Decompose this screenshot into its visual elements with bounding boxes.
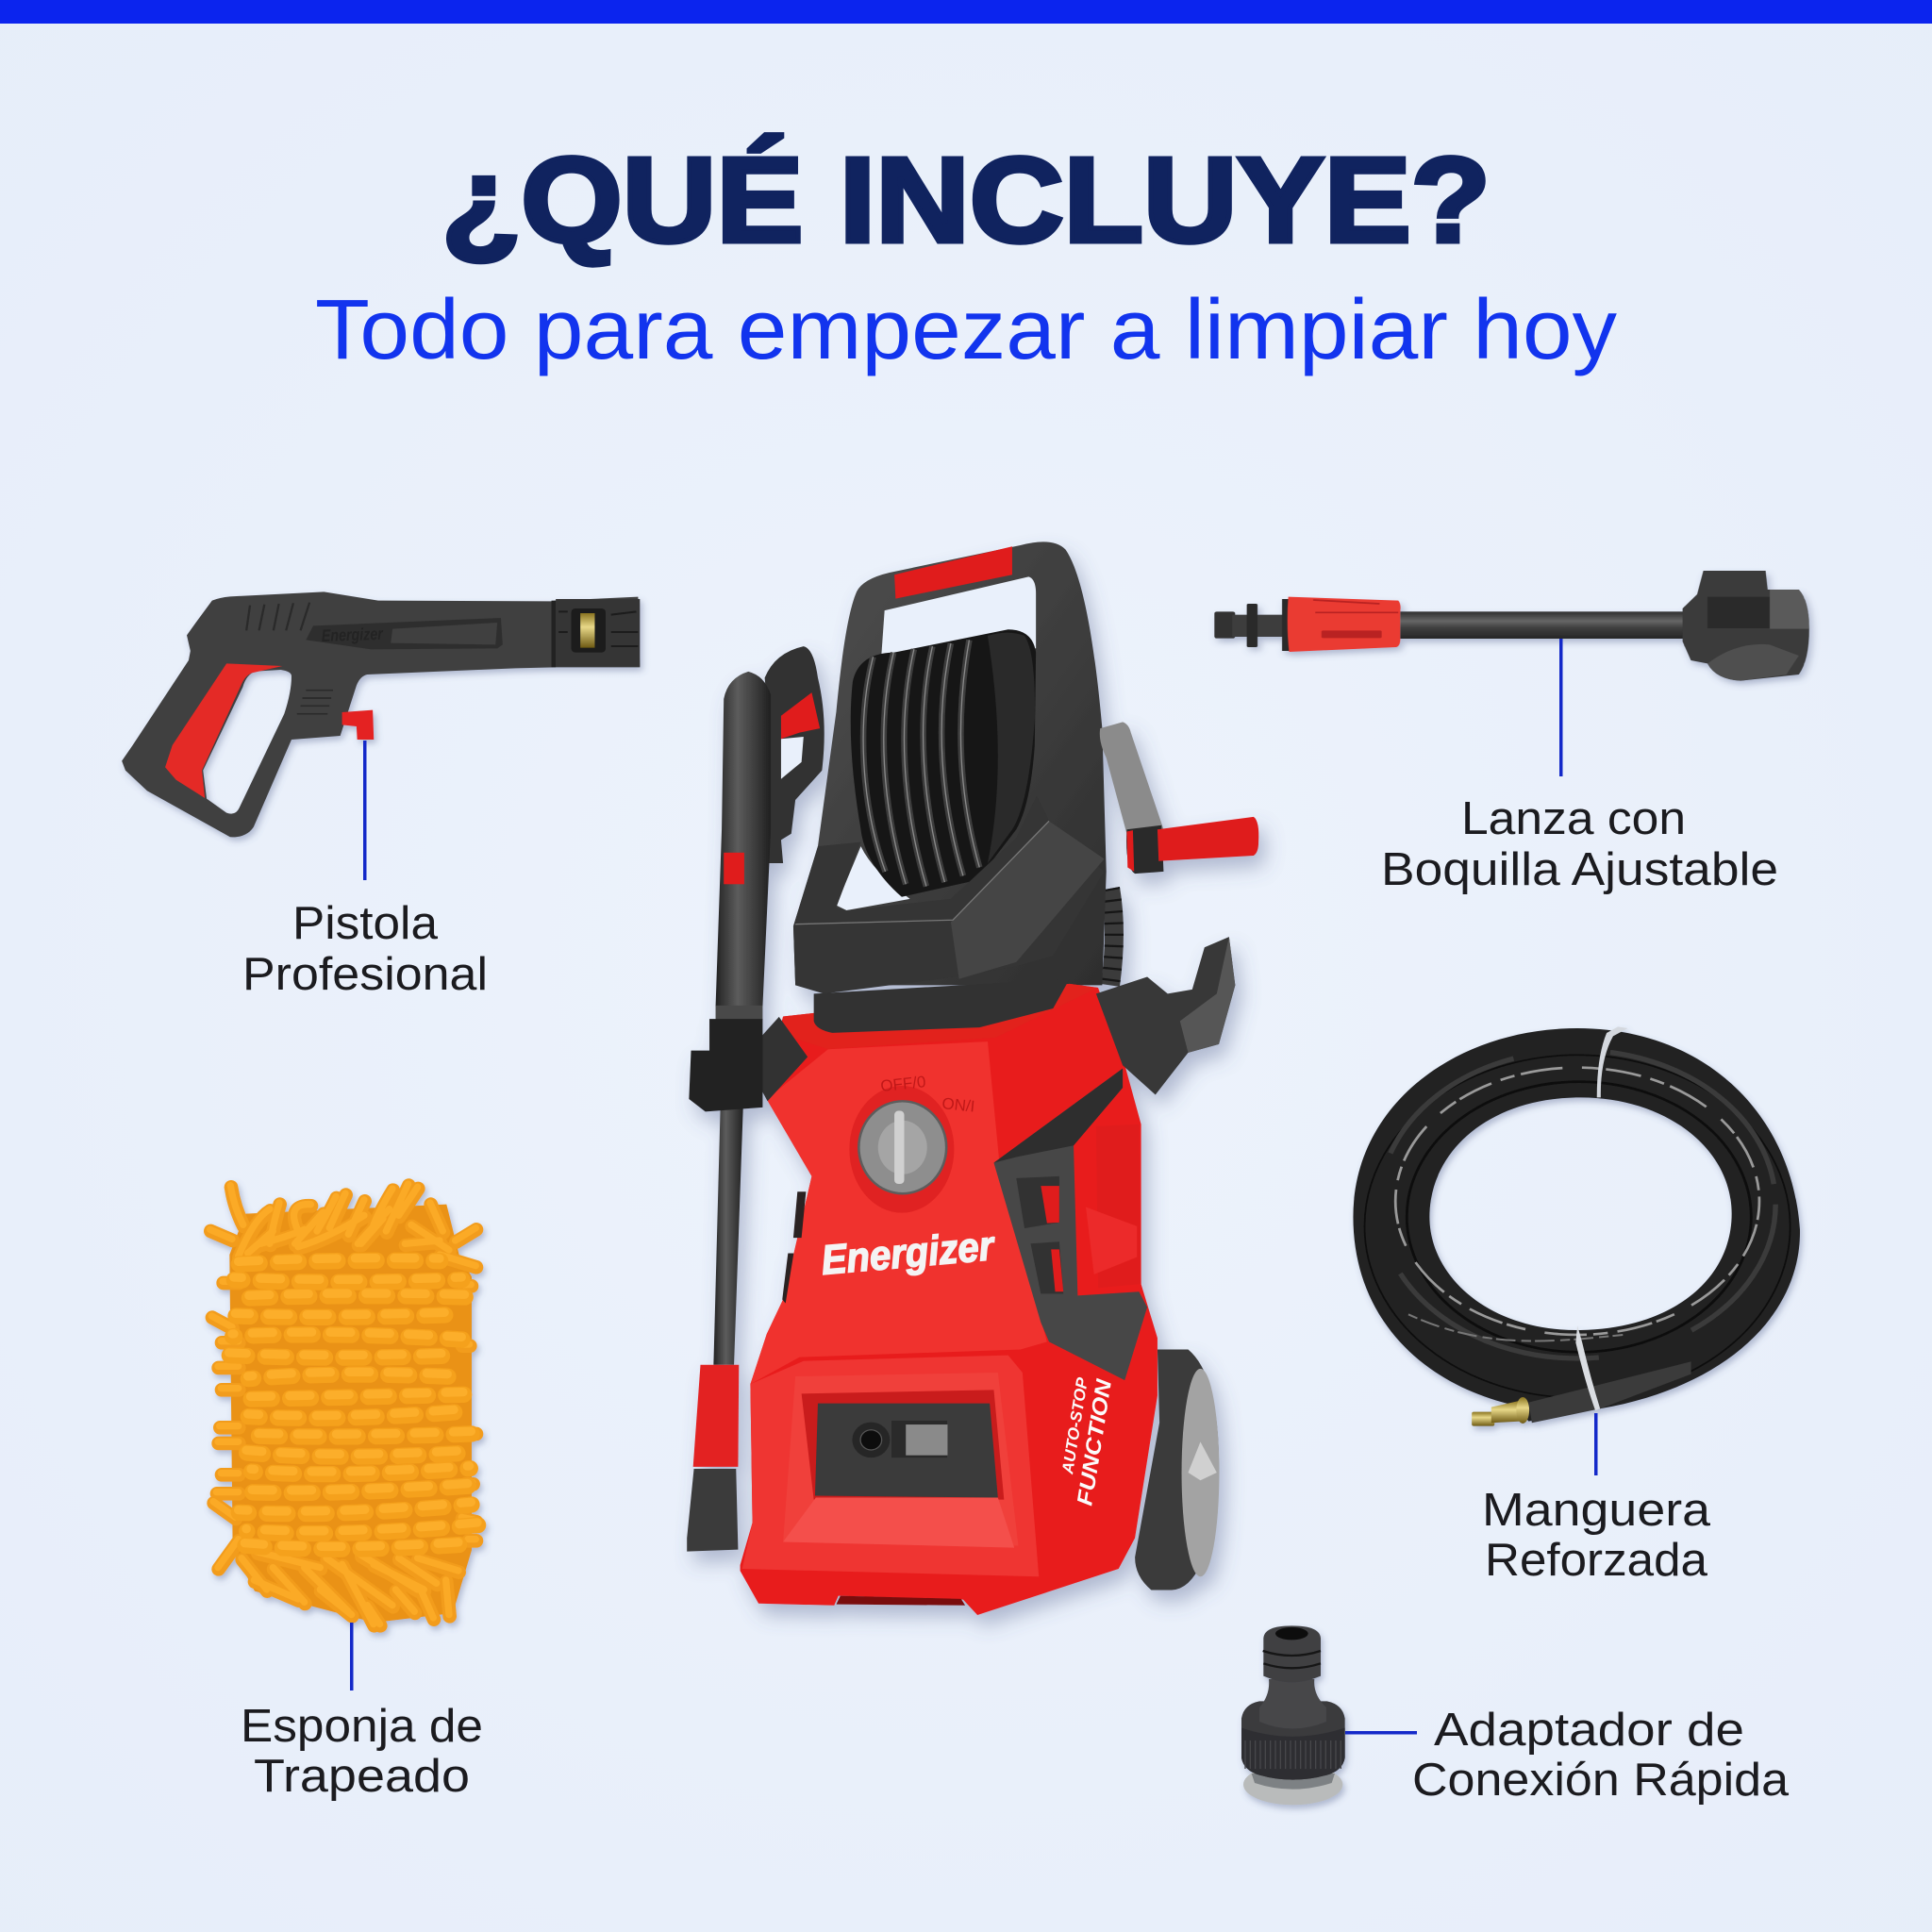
dial labels: OFF/0 (879, 1073, 926, 1095)
label: adaptador: Adaptador de (1434, 1705, 1744, 1756)
brand logo on washer: Energizer (820, 1223, 998, 1284)
callout line: adapter (1345, 1731, 1417, 1734)
label: pistola: Pistola (292, 898, 439, 949)
callout line: sponge (350, 1623, 353, 1690)
label: pistola (242, 898, 488, 1000)
washer side text: AUTO-STOP (1058, 1375, 1091, 1476)
gun brand text: Energizer (321, 625, 384, 645)
callout line: lance (1559, 639, 1562, 776)
icon: chenille sponge (210, 1184, 478, 1625)
label: adaptador (1412, 1705, 1790, 1806)
label: manguera (1482, 1485, 1711, 1586)
washer side text (1058, 1375, 1116, 1507)
label: esponja: Trapeado (254, 1751, 470, 1802)
label: manguera: Manguera (1482, 1485, 1711, 1536)
main product: pressure washer (687, 541, 1258, 1615)
icon: hose coil (1353, 1026, 1800, 1426)
dial labels (879, 1073, 975, 1116)
label: esponja: Esponja de (241, 1701, 483, 1752)
washer side text: FUNCTION (1072, 1377, 1116, 1507)
icon: spray gun (122, 591, 640, 837)
top bar (0, 0, 1932, 24)
label: esponja (241, 1701, 483, 1802)
label: manguera: Reforzada (1485, 1535, 1708, 1586)
title: ¿QUÉ INCLUYE? (441, 133, 1491, 268)
label: adaptador: Conexión Rápida (1412, 1755, 1790, 1806)
dial labels: ON/I (941, 1094, 975, 1116)
icon: adjustable lance (1214, 571, 1809, 681)
label: lanza: Lanza con (1461, 793, 1686, 844)
icon: quick-connect adapter (1241, 1625, 1345, 1805)
callout line: hose (1594, 1413, 1598, 1475)
label: lanza: Boquilla Ajustable (1381, 844, 1778, 895)
callout line: gun (363, 741, 366, 880)
label: pistola: Profesional (242, 949, 488, 1000)
subtitle: Todo para empezar a limpiar hoy (315, 283, 1617, 377)
label: lanza (1381, 793, 1778, 895)
